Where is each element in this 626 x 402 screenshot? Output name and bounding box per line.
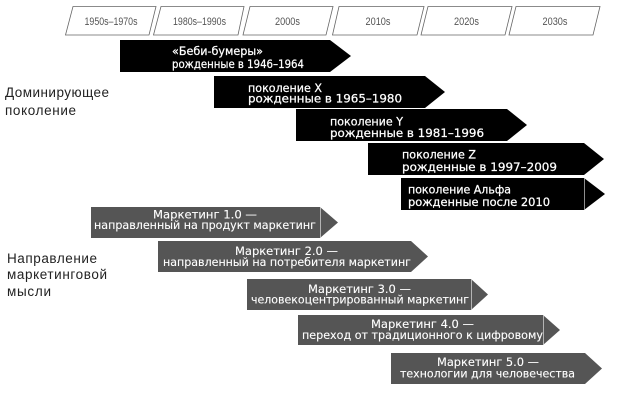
decade: 2010s: [332, 6, 424, 35]
decade: 2030s: [509, 6, 600, 35]
arrow: marketing 2.0: Маркетинг 2.0 —: [235, 244, 338, 258]
arrow: baby boomers: рожденные в 1946–1964: [172, 57, 304, 71]
arrow: marketing 5.0: [391, 353, 602, 384]
label: direction of marketing thought: мысли: [7, 284, 51, 299]
arrow: generation Y: [296, 109, 527, 141]
arrow: baby boomers: «Беби-бумеры»: [172, 44, 263, 58]
label: direction of marketing thought: маркетинговой: [7, 267, 107, 282]
arrow: marketing 1.0: направленный на продукт маркетинг: [94, 218, 316, 232]
arrow: marketing 2.0: направленный на потребителя маркетинг: [163, 255, 411, 269]
decade: 1980s-1990s: [154, 6, 244, 35]
arrow: generation Y: поколение Y: [330, 114, 404, 128]
arrow: marketing 5.0: технологии для человечества: [400, 366, 575, 380]
arrow: generation X: поколение X: [248, 81, 322, 95]
arrow: marketing 1.0: Маркетинг 1.0 —: [153, 208, 257, 222]
arrow: baby boomers: [120, 40, 351, 72]
arrow: marketing 4.0: Маркетинг 4.0 —: [371, 317, 474, 331]
decade: 2010s: 2010s: [366, 16, 391, 28]
arrow: generation Z: [368, 143, 604, 175]
decade: 2000s: [243, 6, 333, 35]
label: dominant generation: Доминирующее: [5, 85, 109, 100]
decade: 2020s: [421, 6, 512, 35]
arrow: generation Alpha: рожденные после 2010: [408, 195, 550, 209]
decade: 1950s-1970s: 1950s–1970s: [84, 16, 138, 28]
arrow: generation Alpha: поколение Альфа: [408, 182, 511, 196]
label: dominant generation: поколение: [5, 103, 76, 118]
decade: 2020s: 2020s: [454, 16, 479, 28]
arrow: generation X: [214, 76, 445, 108]
arrow: generation Alpha: [401, 178, 605, 210]
timeline header: [66, 6, 600, 35]
decade: 1950s-1970s: [66, 6, 156, 35]
arrow: marketing 4.0: переход от традиционного к цифровому: [302, 328, 543, 342]
arrow: marketing 1.0: [91, 207, 338, 238]
arrow: marketing 4.0: [298, 315, 560, 345]
arrow: marketing 3.0: человекоцентрированный маркетинг: [251, 292, 469, 306]
arrow: marketing 3.0: [247, 279, 488, 310]
decade: 1980s-1990s: 1980s–1990s: [173, 16, 226, 28]
arrow: marketing 5.0: Маркетинг 5.0 —: [437, 355, 539, 369]
arrow: generation Z: рожденные в 1997–2009: [402, 160, 557, 174]
arrow: generation Z: поколение Z: [402, 148, 476, 162]
arrow: generation Y: рожденные в 1981–1996: [330, 126, 484, 140]
arrow: generation X: рожденные в 1965–1980: [248, 92, 402, 106]
decade: 2000s: 2000s: [275, 16, 300, 28]
decade: 2030s: 2030s: [542, 16, 568, 28]
arrow: marketing 3.0: Маркетинг 3.0 —: [308, 282, 411, 296]
arrow: marketing 2.0: [158, 241, 428, 272]
label: direction of marketing thought: Направление: [7, 251, 97, 266]
